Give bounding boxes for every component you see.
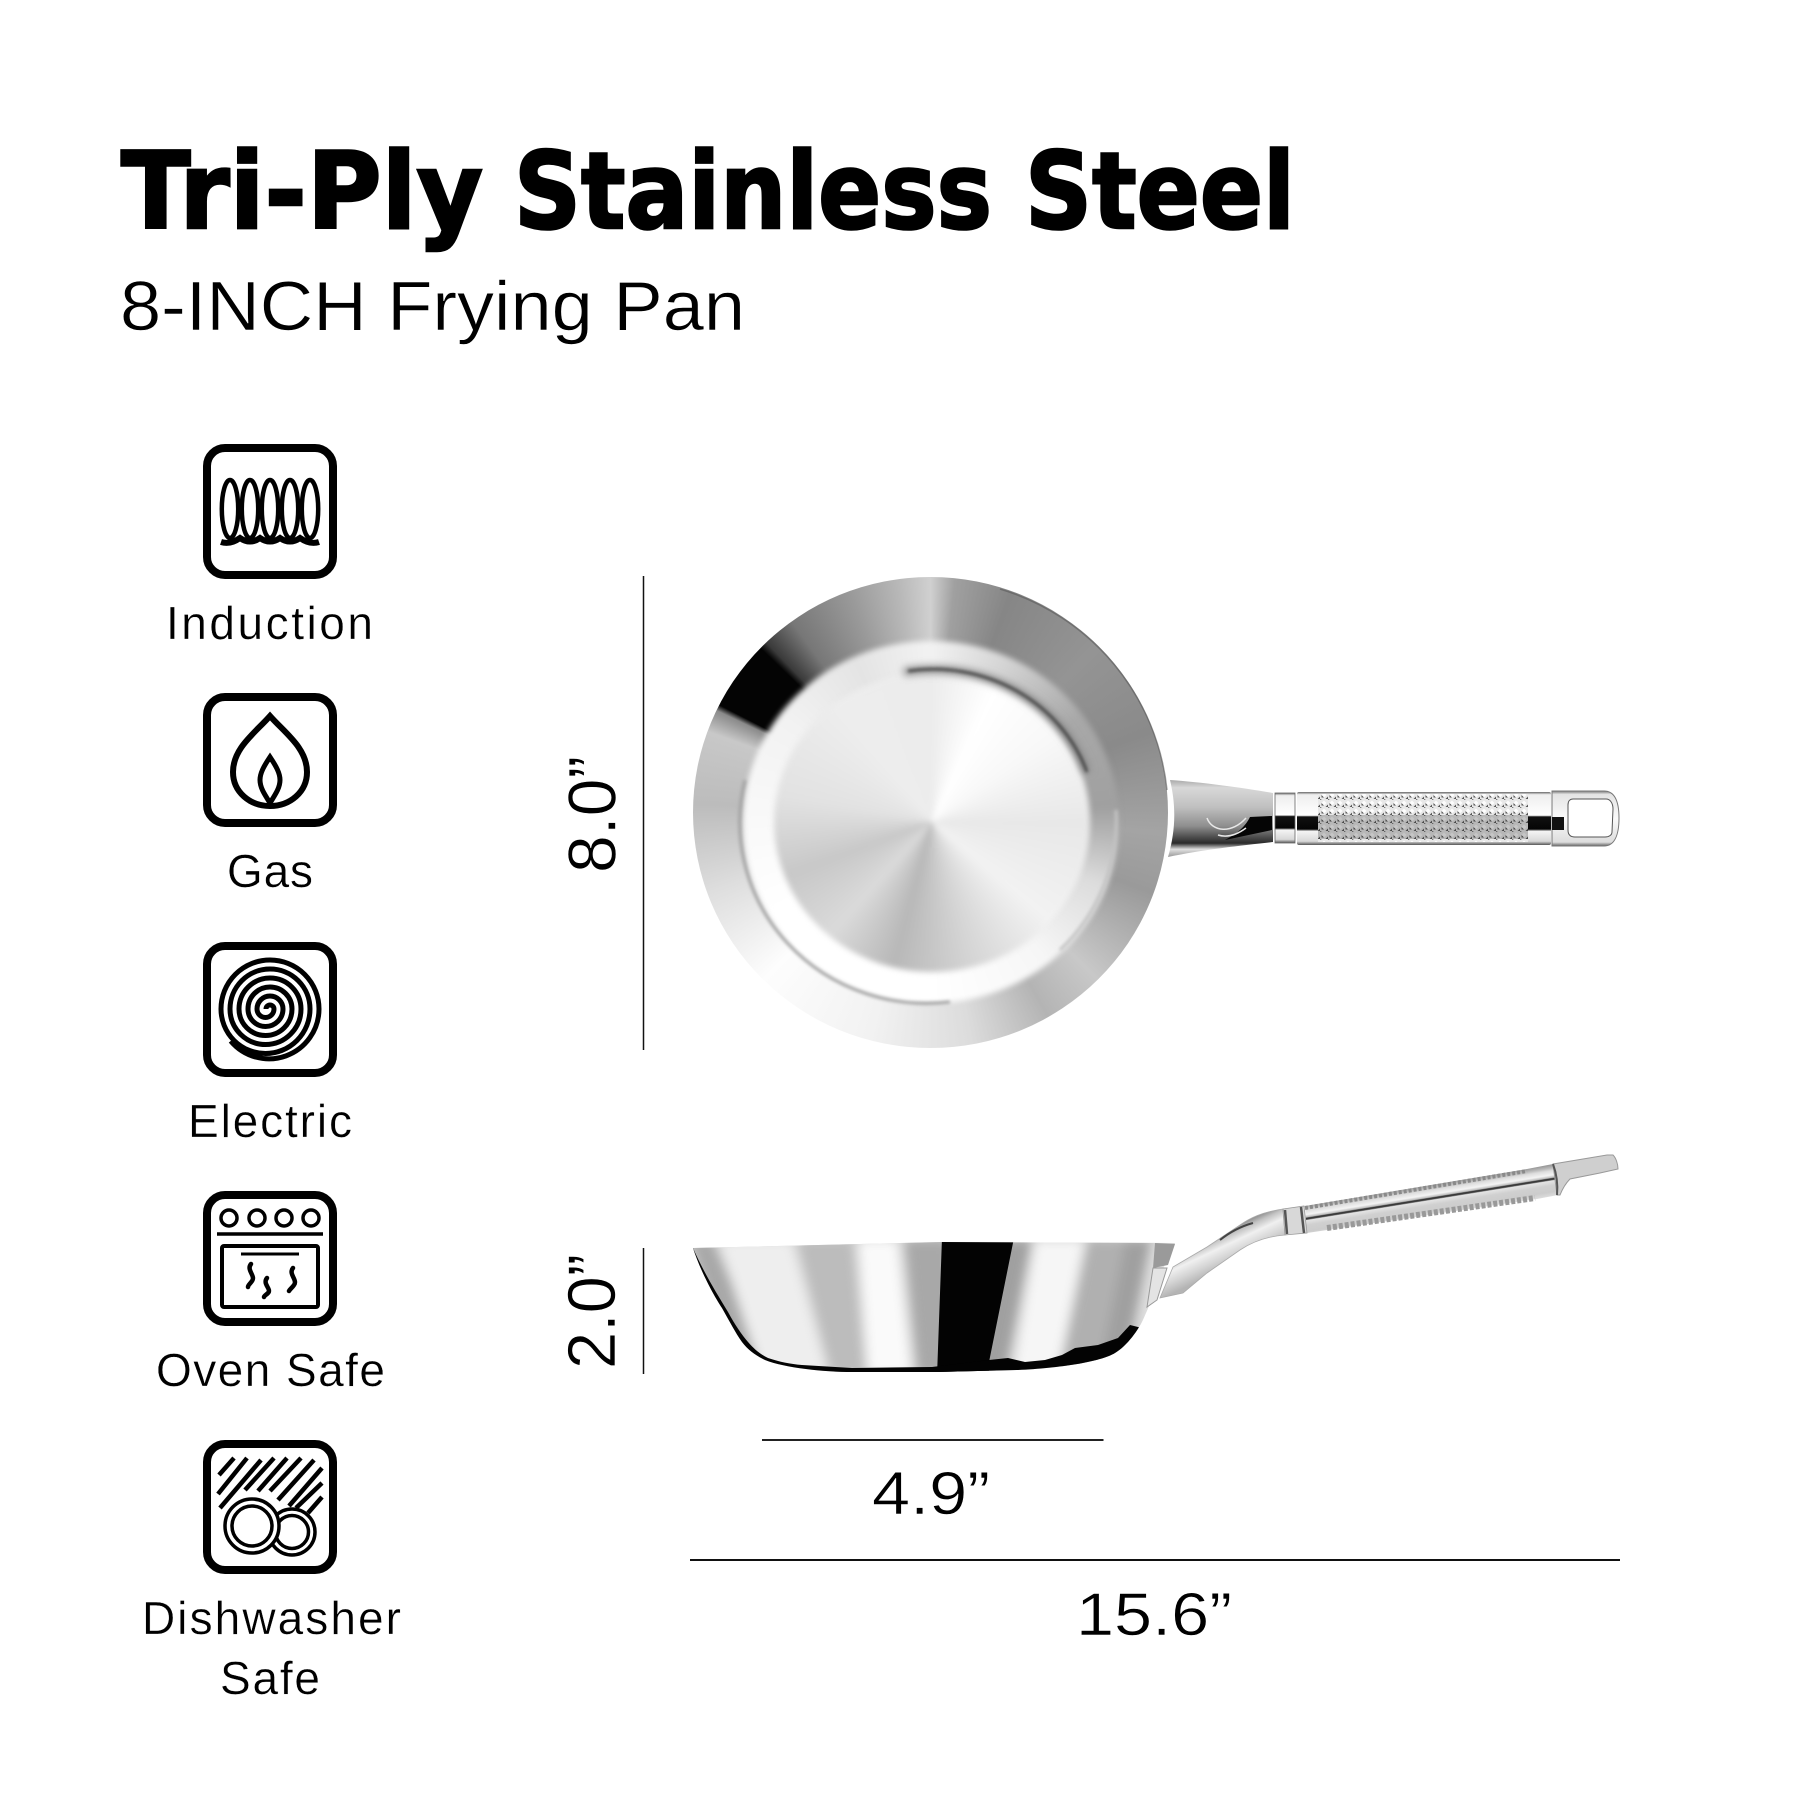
side rim highlight	[1153, 1243, 1175, 1268]
subtitle: 8-INCH Frying Pan	[120, 267, 745, 345]
side body	[693, 1242, 1175, 1372]
pan side view	[693, 1154, 1618, 1372]
title: Stainless	[514, 130, 992, 253]
title	[121, 130, 1295, 253]
icon: induction	[207, 448, 333, 575]
label: dishwasher safe: Safe	[220, 1652, 320, 1704]
pan inner ring	[743, 641, 1119, 1003]
dimension: pan height 2.0 in: 2.0”	[554, 1254, 630, 1369]
label: dishwasher safe: Dishwasher	[142, 1592, 401, 1644]
icon: oven	[207, 1195, 333, 1322]
icon: electric	[207, 946, 333, 1073]
dimension: base width 4.9 in: 4.9”	[872, 1460, 990, 1527]
pan top view	[693, 577, 1620, 1048]
pan rim	[693, 577, 1168, 1048]
pan rim edge	[1000, 589, 1167, 790]
icon: dishwasher	[207, 1444, 333, 1570]
label: induction: Induction	[166, 597, 373, 649]
label: oven safe: Oven Safe	[156, 1344, 385, 1396]
icon: gas	[207, 697, 333, 823]
side handle	[1160, 1155, 1618, 1298]
label: electric: Electric	[188, 1095, 352, 1147]
handle collar	[1275, 793, 1295, 843]
handle neck	[1168, 780, 1273, 857]
title: Tri-Ply	[121, 130, 483, 253]
title: Steel	[1025, 130, 1295, 253]
label: gas: Gas	[227, 845, 313, 897]
pan highlights	[737, 588, 1620, 1007]
label: dishwasher safe	[142, 1592, 401, 1704]
dimension: total length 15.6 in: 15.6”	[1076, 1581, 1232, 1648]
side handle collar	[1147, 1268, 1167, 1307]
handle grip	[1297, 792, 1551, 845]
pan base disc	[774, 672, 1090, 972]
handle end loop	[1552, 791, 1619, 846]
dimension: pan diameter 8.0 in: 8.0”	[554, 756, 630, 873]
